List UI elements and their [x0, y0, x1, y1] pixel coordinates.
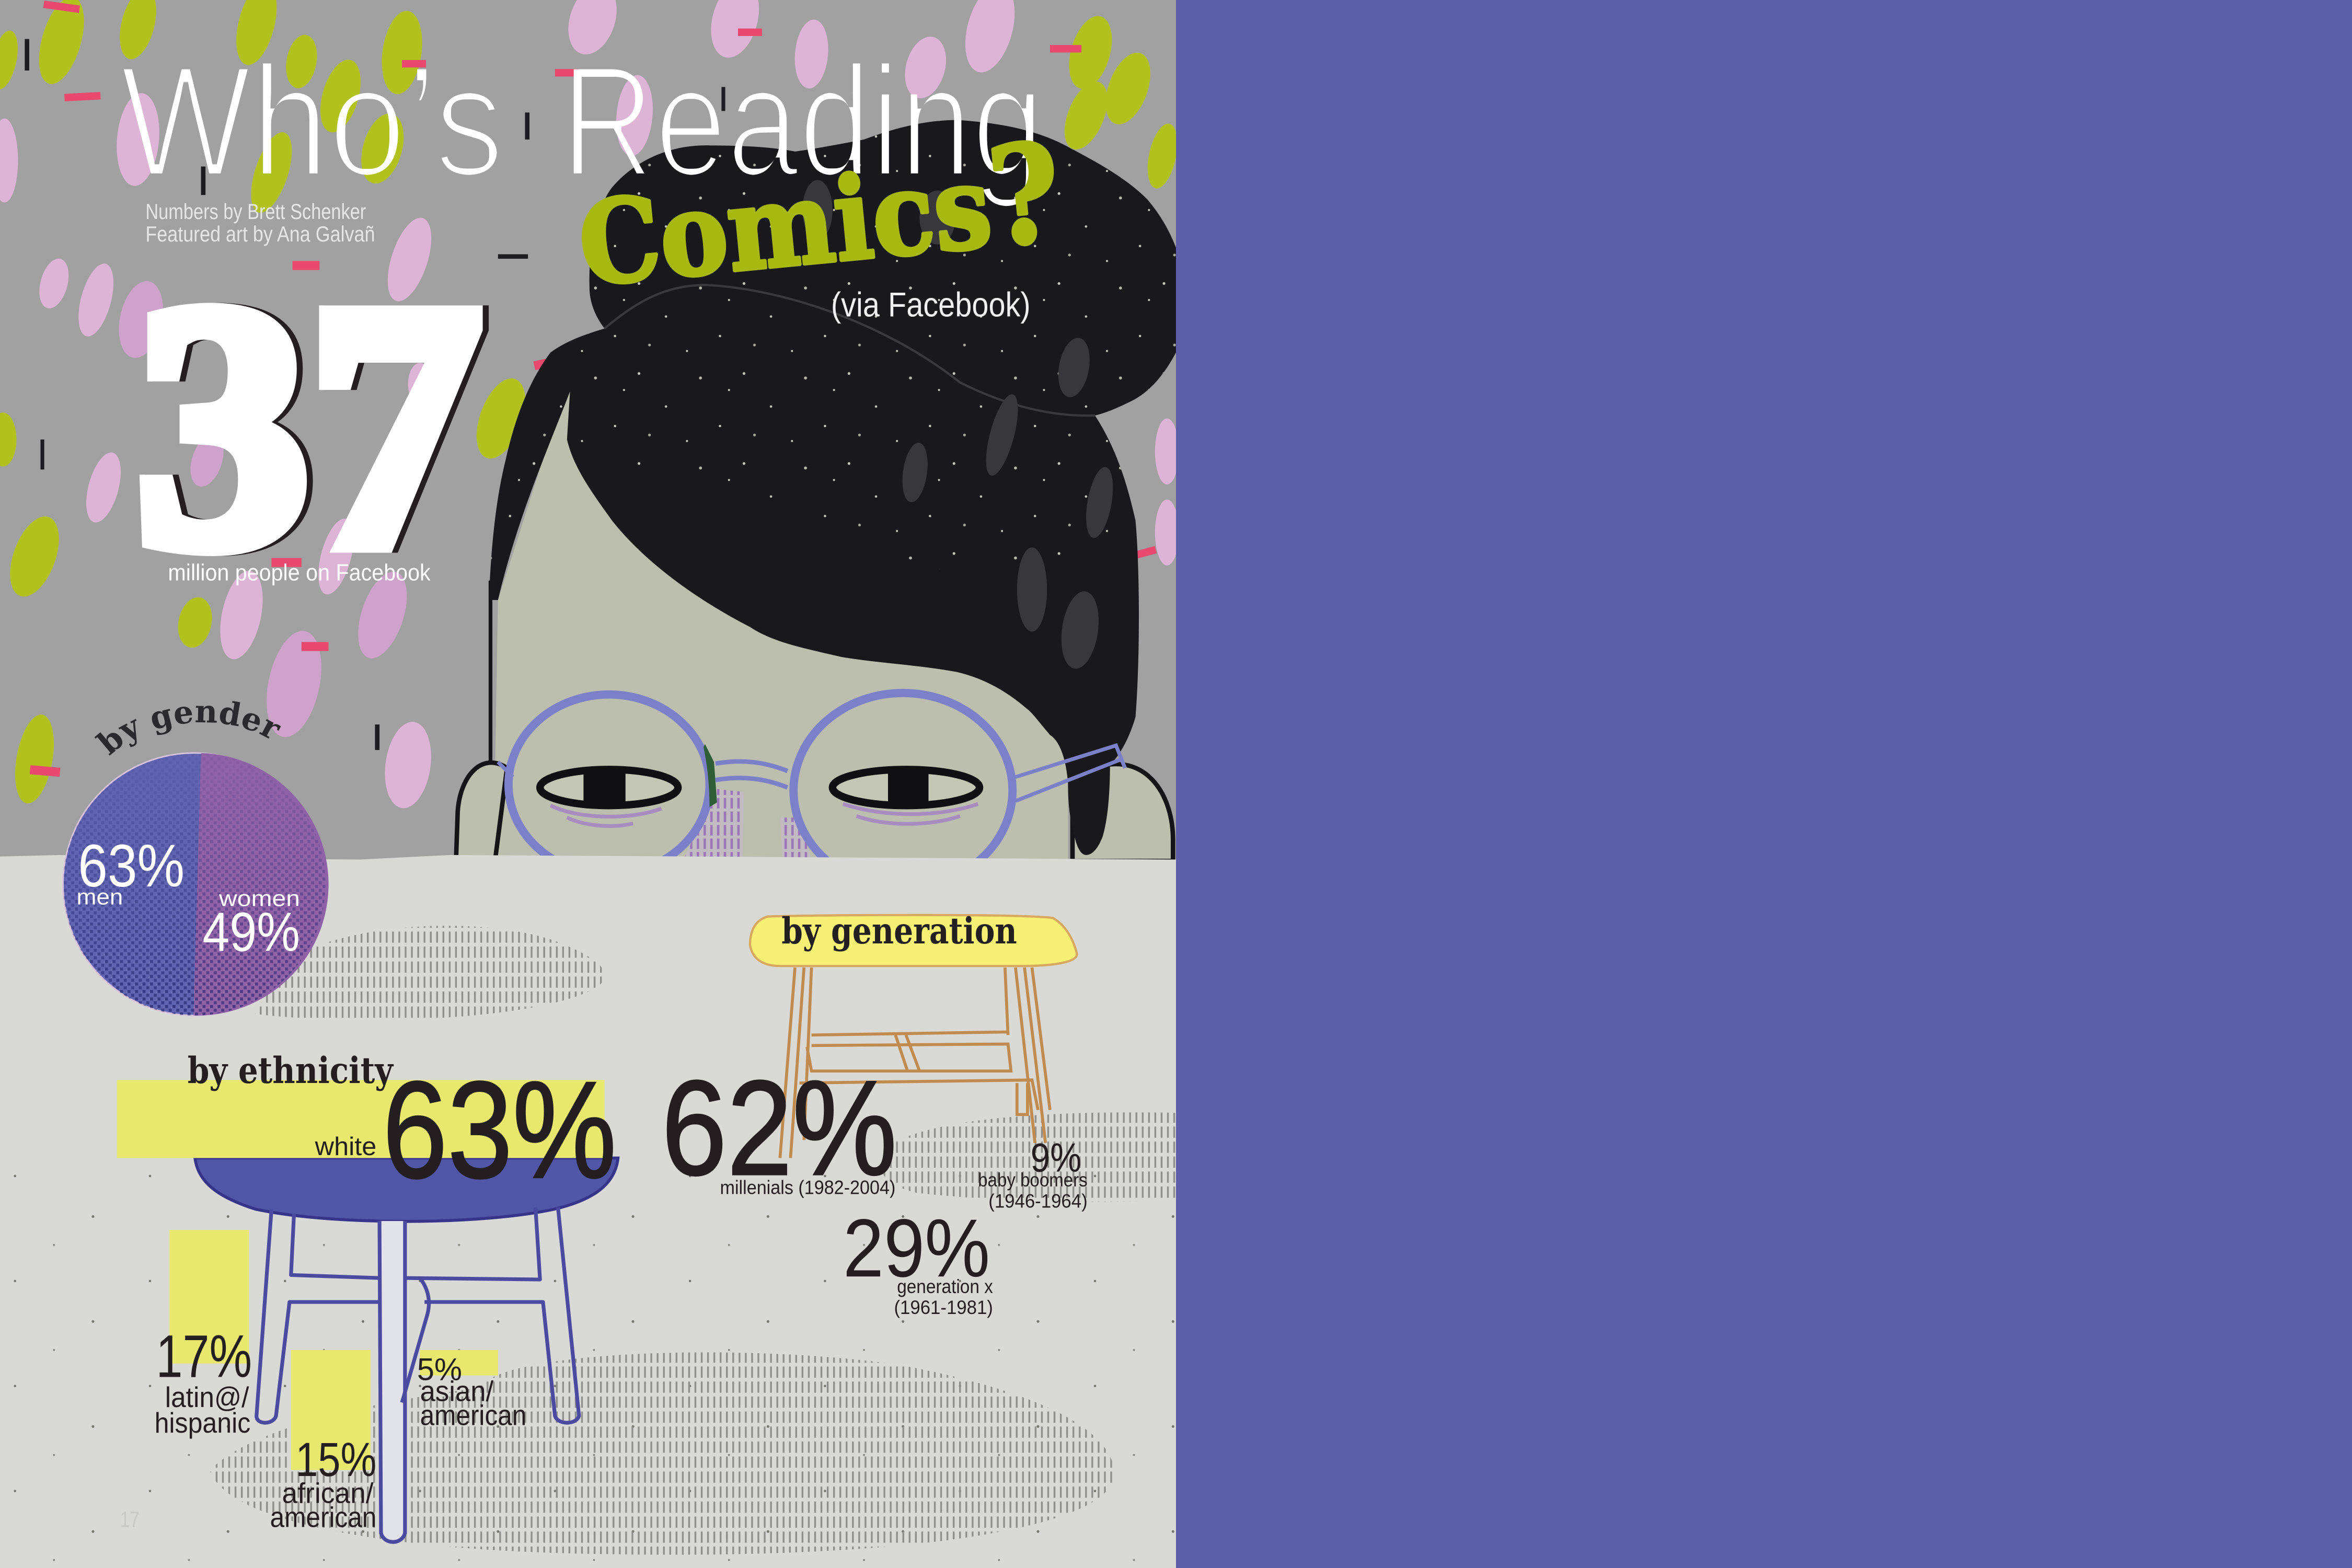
caption: million people: million people on Facebook: [168, 560, 431, 586]
ethnicity: hispanic label: hispanic: [155, 1407, 250, 1439]
pie: women label: women: [218, 886, 300, 911]
blue stool seat: [195, 1158, 618, 1221]
byline: [145, 199, 375, 246]
title: Comics?: Comics?: [571, 112, 1067, 317]
ethnicity: latin value: 17%: [156, 1323, 252, 1390]
nose shading: [683, 789, 812, 861]
heading: by ethnicity: by ethnicity: [188, 1050, 394, 1092]
hair speckle: [489, 120, 1176, 600]
subtitle: via Facebook: (via Facebook): [831, 285, 1031, 324]
ethnicity: african value: 15%: [295, 1433, 376, 1486]
pie: men slice: [63, 753, 326, 1016]
generation: gen x label: generation x: [897, 1275, 993, 1297]
title word: Reading: Reading: [561, 33, 1044, 210]
grey wall background: [0, 0, 1176, 870]
ethnicity: 63% value: 63%: [383, 1053, 617, 1207]
pie chart: by gender: [63, 753, 329, 1016]
generation: boomers value: 9%: [1031, 1135, 1081, 1180]
ethnicity: american label: american: [270, 1502, 376, 1534]
glasses: [497, 689, 1127, 858]
face outline: [490, 581, 491, 859]
by ethnicity: latin@ bar: [169, 1230, 249, 1364]
byline: art credit: Featured art by Ana Galvañ: [145, 222, 375, 246]
heading: by generation: by generation: [781, 910, 1017, 952]
blue stool legs: [257, 1207, 579, 1542]
hatch shadow under orange stool: [879, 1112, 1185, 1202]
pie: 49% value: 49%: [202, 901, 300, 963]
generation: gen x years: (1961-1981): [894, 1296, 993, 1318]
big number face: 37: [136, 234, 481, 619]
page number: 17: [120, 1507, 140, 1532]
orange stool: [780, 967, 1050, 1158]
hair bun line: [605, 285, 1095, 416]
brush strokes: pink: [0, 0, 1179, 811]
generation: gen x value: 29%: [843, 1202, 990, 1294]
glasses green hinge: [704, 744, 717, 807]
hatch shadow under blue stool: [210, 1352, 1114, 1555]
table surface: [0, 855, 1176, 1568]
hatch shadow under pie: [255, 926, 605, 1020]
left ear: [456, 763, 507, 861]
brush strokes: lime: [0, 0, 1183, 806]
eye right: [833, 769, 979, 805]
heading: by gender: by gender: [94, 701, 281, 756]
face: [493, 375, 1068, 861]
ethnicity: latin label: latin@/: [165, 1381, 249, 1413]
big number: 37: [136, 234, 488, 619]
blank purple facing page: [1176, 0, 2352, 1568]
pie grain: [63, 753, 326, 1016]
title word: Who's: Who’s: [120, 33, 504, 209]
by ethnicity: african american bar: [291, 1350, 371, 1470]
generation: boomers label: baby boomers: [978, 1169, 1088, 1191]
title: Who's Reading: [120, 33, 1044, 210]
hair: [489, 120, 1176, 855]
pie: 63% value: 63%: [78, 833, 185, 900]
blue stool: [195, 1158, 618, 1542]
by ethnicity: asian american bar: [420, 1350, 498, 1376]
orange stool seat: [750, 915, 1077, 966]
generation: boomers years: (1946-1964): [988, 1190, 1088, 1212]
generation: millenials label: millenials (1982-2004): [720, 1176, 895, 1198]
pie: women slice: [193, 753, 329, 1016]
brush strokes: black ticks: [25, 39, 725, 750]
right ear: [1073, 764, 1173, 861]
hair smudges: [802, 180, 1117, 671]
under-eye lines: [550, 804, 978, 826]
byline: numbers credit: Numbers by Brett Schenker: [145, 199, 366, 224]
brush strokes: red dashes: [30, 1, 1157, 777]
pie: men label: men: [76, 885, 123, 910]
eye left: [540, 769, 678, 805]
big number shadow: 37: [143, 234, 488, 619]
ethnicity: asian label: asian/: [420, 1375, 494, 1407]
ethnicity: white label: white: [315, 1133, 376, 1161]
character: woman peering over the table: [456, 120, 1176, 888]
ethnicity: asian american label: american: [420, 1399, 526, 1431]
generation: millenials value: 62%: [662, 1052, 897, 1203]
table specks: [0, 1170, 1176, 1568]
by ethnicity: white bar: [117, 1080, 605, 1158]
ethnicity: african label: african/: [282, 1478, 374, 1509]
ethnicity: asian value: 5%: [417, 1351, 462, 1387]
